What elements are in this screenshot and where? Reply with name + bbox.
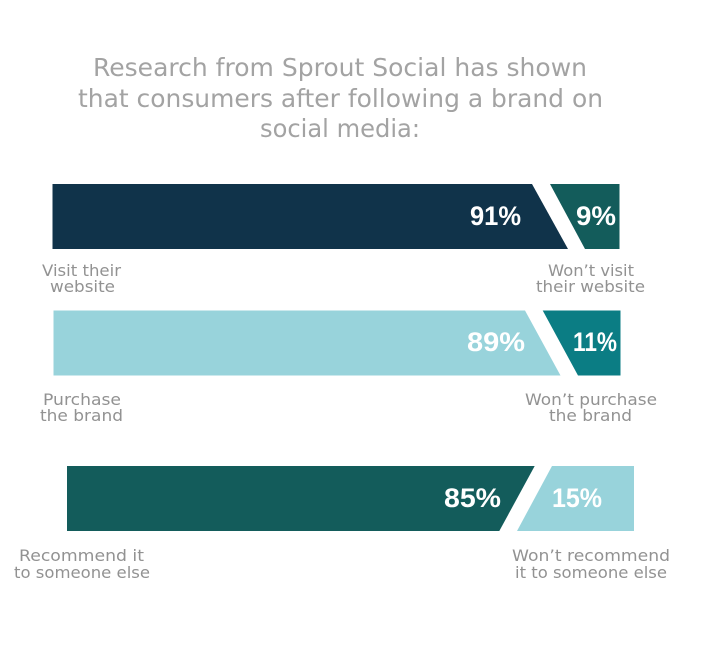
title (78, 53, 603, 143)
value: 91%: 91% (470, 201, 521, 231)
row 1: visit their website (42, 184, 645, 296)
value: 9%: 9% (576, 201, 616, 231)
row 3: recommend it to someone else (14, 466, 670, 582)
label: purchase the brand: Purchase (43, 390, 121, 409)
value: 11%: 11% (573, 327, 617, 357)
label: visit their website: website (50, 277, 115, 296)
label: recommend it to someone else: to someone else (14, 563, 150, 582)
label: recommend it to someone else (14, 546, 150, 582)
title: social media: (260, 114, 420, 143)
label: won't purchase the brand (525, 390, 657, 425)
label: won't recommend it to someone else: Won’t recommend (512, 546, 670, 565)
bar: 91% visit (52, 184, 568, 249)
label: purchase the brand (40, 390, 123, 425)
bar: 15% won't recommend (517, 466, 634, 531)
label: visit their website (42, 261, 121, 296)
bar: 85% recommend (67, 466, 535, 531)
label: purchase the brand: the brand (40, 406, 123, 425)
label: won't visit their website: Won’t visit (548, 261, 634, 280)
title: that consumers after following a brand on (78, 84, 603, 113)
bar: 9% won't visit (550, 184, 620, 249)
value: 89%: 89% (467, 327, 525, 357)
value: 85%: 85% (444, 483, 501, 513)
bar: 11% won't purchase (543, 310, 620, 376)
label: visit their website: Visit their (42, 261, 121, 280)
label: won't purchase the brand: Won’t purchase (525, 390, 657, 409)
value: 15%: 15% (552, 483, 602, 513)
label: won't recommend it to someone else: it to someone else (515, 563, 667, 582)
label: won't purchase the brand: the brand (549, 406, 632, 425)
label: won't recommend it to someone else (512, 546, 670, 582)
bar: 89% purchase (54, 310, 560, 376)
label: won't visit their website: their website (536, 277, 645, 296)
row 2: purchase the brand (40, 310, 657, 425)
label: won't visit their website (536, 261, 645, 296)
label: recommend it to someone else: Recommend it (19, 546, 144, 565)
title: Research from Sprout Social has shown (93, 53, 587, 82)
